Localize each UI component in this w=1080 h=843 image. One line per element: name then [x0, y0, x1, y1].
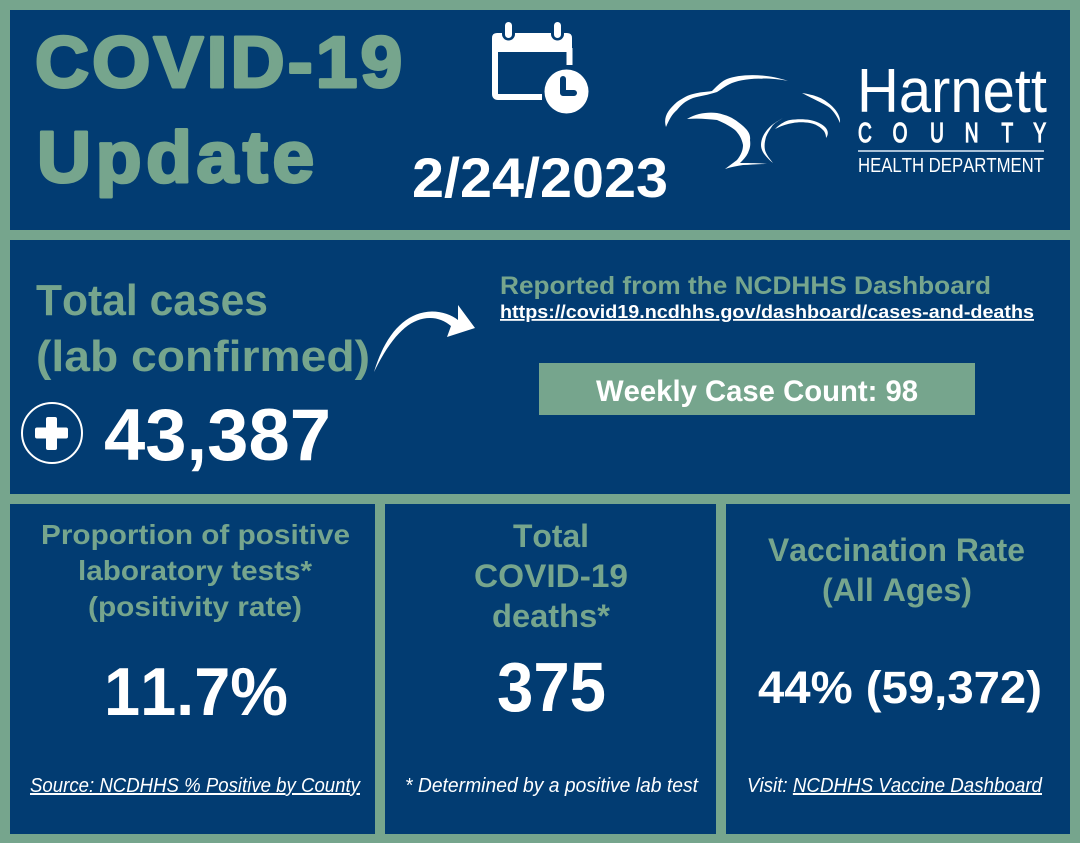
- heading: total deaths: COVID-19: [474, 558, 628, 594]
- total cases number: 43,387: [104, 395, 331, 476]
- heading: total cases: [36, 276, 370, 381]
- heading: positivity rate: (positivity rate): [88, 591, 302, 622]
- title: [35, 22, 405, 198]
- arrow: [374, 305, 475, 372]
- positivity value: 11.7%: [104, 654, 288, 730]
- heading: total cases: (lab confirmed): [36, 332, 370, 381]
- panel: positivity rate: [10, 504, 375, 834]
- icon: tree: [665, 75, 840, 169]
- heading: total cases: Total cases: [36, 276, 268, 325]
- logo: Harnett County Health Department: [665, 57, 1047, 177]
- source heading: Reported from the NCDHHS Dashboard: [500, 272, 991, 300]
- weekly case count callout: Weekly Case Count: 98: [596, 375, 918, 408]
- weekly case count callout: [539, 363, 975, 415]
- source note: Source: NCDHHS % Positive by County: [30, 775, 361, 797]
- title: Update: [37, 117, 319, 198]
- panel: vaccination rate: [726, 504, 1070, 834]
- deaths note: * Determined by a positive lab test: [405, 775, 699, 797]
- heading: total deaths: Total: [513, 518, 589, 554]
- heading: positivity rate: Proportion of positive: [41, 519, 350, 550]
- vaccination value: 44% (59,372): [758, 662, 1042, 713]
- vaccination note: Visit: NCDHHS Vaccine Dashboard: [747, 775, 1043, 797]
- deaths value: 375: [497, 648, 606, 726]
- heading: positivity rate: laboratory tests*: [78, 555, 312, 586]
- heading: positivity rate: [41, 519, 350, 622]
- title: COVID-19: [35, 22, 405, 103]
- source link: https://covid19.ncdhhs.gov/dashboard/cases-and-deaths: [500, 302, 1034, 322]
- panel: total cases: [10, 240, 1070, 494]
- heading: vaccination rate: Vaccination Rate: [768, 532, 1025, 568]
- panel: header: [10, 10, 1070, 230]
- icon: plus in circle: [22, 403, 82, 463]
- county wordmark: COUNTY: [858, 117, 1046, 149]
- heading: total deaths: [474, 518, 628, 634]
- logo: Harnett County Health Department: Harnett: [857, 57, 1047, 126]
- logo: Harnett County Health Department: HEALTH DEPARTMENT: [858, 155, 1044, 177]
- panel: total deaths: [385, 504, 716, 834]
- date: 2/24/2023: [412, 146, 668, 209]
- heading: vaccination rate: (All Ages): [822, 572, 972, 608]
- icon: calendar with clock: [492, 22, 588, 114]
- heading: vaccination rate: [768, 532, 1025, 608]
- heading: total deaths: deaths*: [492, 598, 611, 634]
